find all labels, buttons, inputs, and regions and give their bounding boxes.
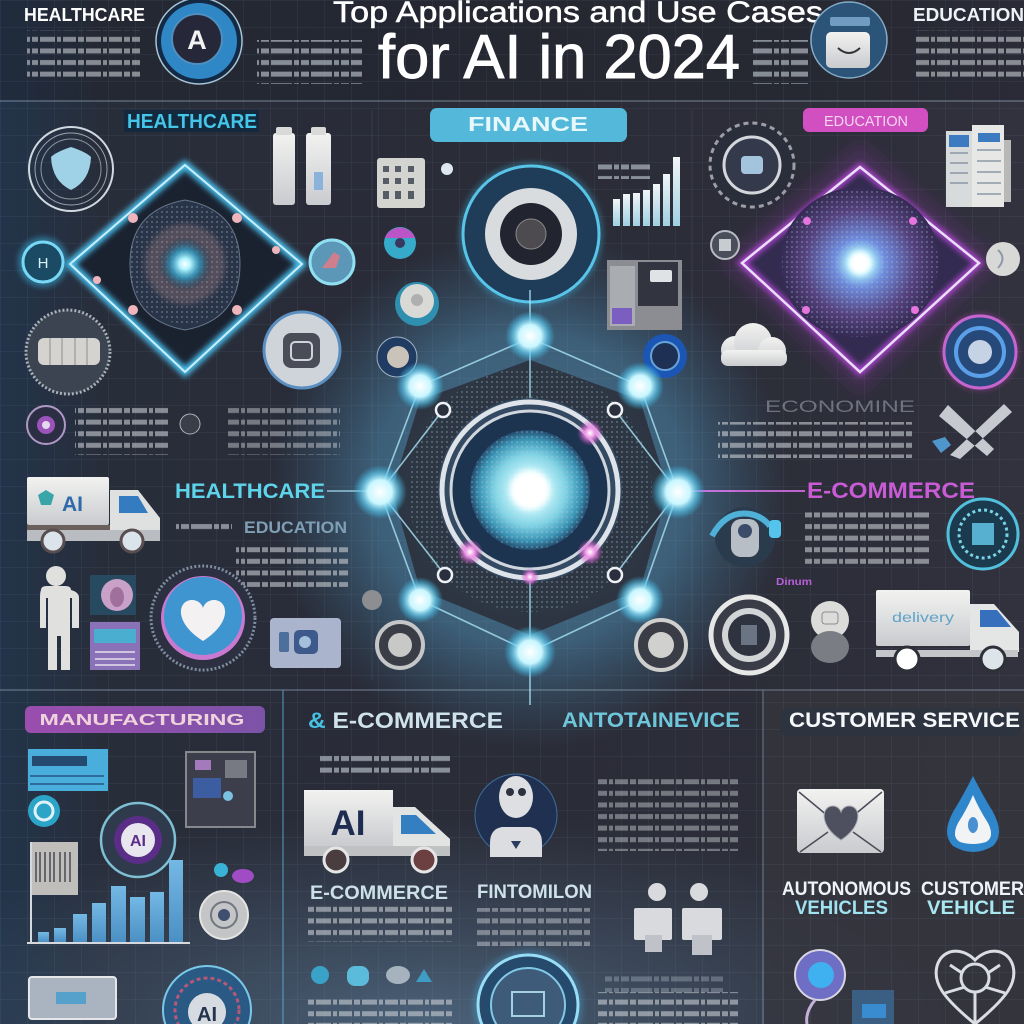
icon: right bottom knob (636, 620, 686, 670)
heading: finance pill: FINANCE (468, 114, 588, 136)
icon: small hex (180, 414, 200, 434)
icon: pink blue dot (384, 227, 416, 259)
icon: spiral disc (200, 891, 248, 939)
heading: purple banner (25, 706, 265, 733)
heading: healthcare top: HEALTHCARE (24, 5, 145, 25)
heading: e-commerce bottom: & E-COMMERCE (308, 708, 503, 733)
heading: customer service: CUSTOMER SERVICE (789, 709, 1020, 732)
heading: autonomous vehicles: VEHICLES (795, 898, 888, 919)
icon: person (40, 566, 79, 670)
icon: robot (475, 774, 557, 857)
connector to e-commerce (678, 490, 805, 492)
icon: delivery truck AI: AI (62, 493, 83, 516)
icon: brain coin (377, 337, 417, 377)
icon: bottle right (306, 127, 331, 205)
panel: customer service (780, 708, 1024, 1024)
panel: top-left healthcare summary (24, 0, 362, 84)
icon: figure left (634, 883, 672, 952)
icon: AI badge: A (187, 25, 207, 55)
bar chart: finance (598, 157, 680, 226)
heading: finance pill (430, 108, 627, 142)
text block: education notes (718, 422, 913, 458)
icon: plane (932, 404, 1012, 459)
bar chart: analytics (27, 842, 190, 943)
central hub (327, 290, 805, 705)
text block: education summary (916, 30, 1024, 80)
icon: document (946, 125, 1011, 207)
heading: garbled fintech: FINTOMILON (477, 882, 592, 903)
icon: left glowing node: H (38, 255, 48, 272)
hub nodes (353, 311, 705, 678)
icon: purple card (90, 622, 140, 670)
text block: faded heading (605, 972, 723, 992)
heading: purple banner: MANUFACTURING (40, 712, 244, 729)
icon: cyan card (28, 749, 108, 791)
icon: coin (26, 310, 110, 394)
icon: bottle left (273, 127, 295, 205)
heading: healthcare: HEALTHCARE (127, 111, 257, 133)
icon: pink swirl (942, 314, 1018, 390)
text block: healthcare left (75, 405, 170, 455)
heading: e-commerce lower: E-COMMERCE (310, 883, 448, 904)
icon: hexagon badge (90, 575, 136, 615)
panel: finance (377, 108, 687, 378)
icon: dashboard screen (186, 752, 255, 827)
panel: top-right education summary (753, 2, 1024, 84)
text block: healthcare summary (27, 30, 140, 80)
icon: cyan swirl (28, 795, 60, 827)
icon: AI delivery truck (304, 790, 450, 872)
icon: water drop (947, 776, 999, 852)
text block: healthcare right (228, 405, 340, 455)
panel: middle left (27, 477, 348, 670)
text: small violet note: Dinum (776, 577, 812, 588)
icon: AI ring purple: AI (130, 833, 146, 850)
text block: middle left notes (236, 543, 348, 587)
text block: e-commerce notes (307, 906, 453, 942)
icon: figure right (682, 883, 722, 955)
icon: chip circle (948, 499, 1018, 569)
icon: cloud (721, 323, 787, 366)
icon: AI badge (156, 0, 242, 84)
heading: education top: EDUCATION (913, 5, 1024, 25)
icon: heart lattice (936, 951, 1014, 1024)
icon: small cluster (311, 966, 432, 986)
icon: gradient pin (795, 950, 845, 1024)
icon: target disc (711, 597, 787, 673)
icon: right node (310, 240, 354, 284)
title (333, 0, 823, 92)
panel: healthcare (18, 110, 354, 455)
heading: garbled subheading: EDUCATION (244, 518, 347, 537)
icon: envelope (797, 789, 884, 853)
heading: autonomous vehicles: AUTONOMOUS (782, 879, 911, 900)
heading: healthcare middle: HEALTHCARE (175, 480, 325, 503)
heading: customer vehicle: VEHICLE (927, 898, 1015, 919)
icon: left bottom knob (377, 622, 423, 668)
heading: education pill: EDUCATION (824, 113, 908, 130)
heading: customer vehicle (921, 879, 1024, 919)
icon: app ring (264, 312, 340, 388)
panel: bottom middle e-commerce (304, 708, 740, 1024)
title: for AI in 2024 (378, 23, 740, 92)
icon: device box (270, 618, 341, 668)
icon: small ring (711, 231, 739, 259)
heading: autonomous vehicles (782, 879, 911, 919)
icon: ivory pin (811, 601, 849, 663)
icon: delivery truck AI (27, 477, 160, 552)
icon: small white dot (441, 163, 453, 175)
icon: AI circle bottom (163, 966, 251, 1024)
icon: small violet badge (27, 406, 65, 444)
hub rings (408, 368, 652, 612)
icon: smiling device (811, 2, 887, 78)
icon: AI ring purple (101, 803, 175, 877)
icon: left glowing node (18, 237, 68, 287)
icon: finance lens (459, 162, 603, 306)
panel: middle right (362, 478, 1019, 673)
heading: faded economy: ECONOMINE (765, 397, 915, 416)
text block: service notes (598, 775, 738, 851)
icon: small duo dots (214, 863, 254, 883)
icon: gear ring (710, 123, 794, 207)
icon: tablet (29, 977, 116, 1019)
icon: shield robot (712, 507, 781, 567)
icon: blue gateway (473, 950, 583, 1024)
heading: e-commerce middle: E-COMMERCE (807, 478, 975, 503)
text block: fintech notes (477, 908, 591, 946)
icon: small glyph row (320, 755, 450, 775)
text block: healthcare side notes (257, 40, 362, 84)
text block: title side notes (753, 40, 808, 84)
text block: lower service notes (598, 992, 738, 1024)
icon: ivory ring (986, 242, 1020, 276)
text block: middle right notes (805, 510, 930, 570)
heading: education pill (803, 108, 928, 132)
text block: e-commerce lower notes (307, 997, 453, 1024)
network lines (327, 290, 735, 705)
icon: barcode card (30, 842, 78, 895)
icon: terminal (607, 260, 682, 330)
icon: heart circle (151, 566, 255, 670)
icon: small knob (362, 590, 382, 610)
panel: education (710, 108, 1020, 459)
icon: education diamond (720, 140, 1000, 395)
heading: garbled service: ANTOTAINEVICE (562, 709, 740, 732)
icon: healthcare diamond (70, 165, 302, 372)
icon: shield ring (29, 127, 113, 211)
icon: small device (852, 990, 894, 1024)
text block: subheading side (176, 518, 232, 534)
icon: AI delivery truck: AI (330, 804, 366, 843)
panel: bottom left analytics (25, 706, 265, 1024)
icon: delivery truck right: delivery (892, 609, 954, 625)
icon: building card (377, 158, 425, 208)
icon: ivory knob (395, 282, 439, 326)
icon: delivery truck right (876, 590, 1019, 671)
icon: globe coin (643, 334, 687, 378)
